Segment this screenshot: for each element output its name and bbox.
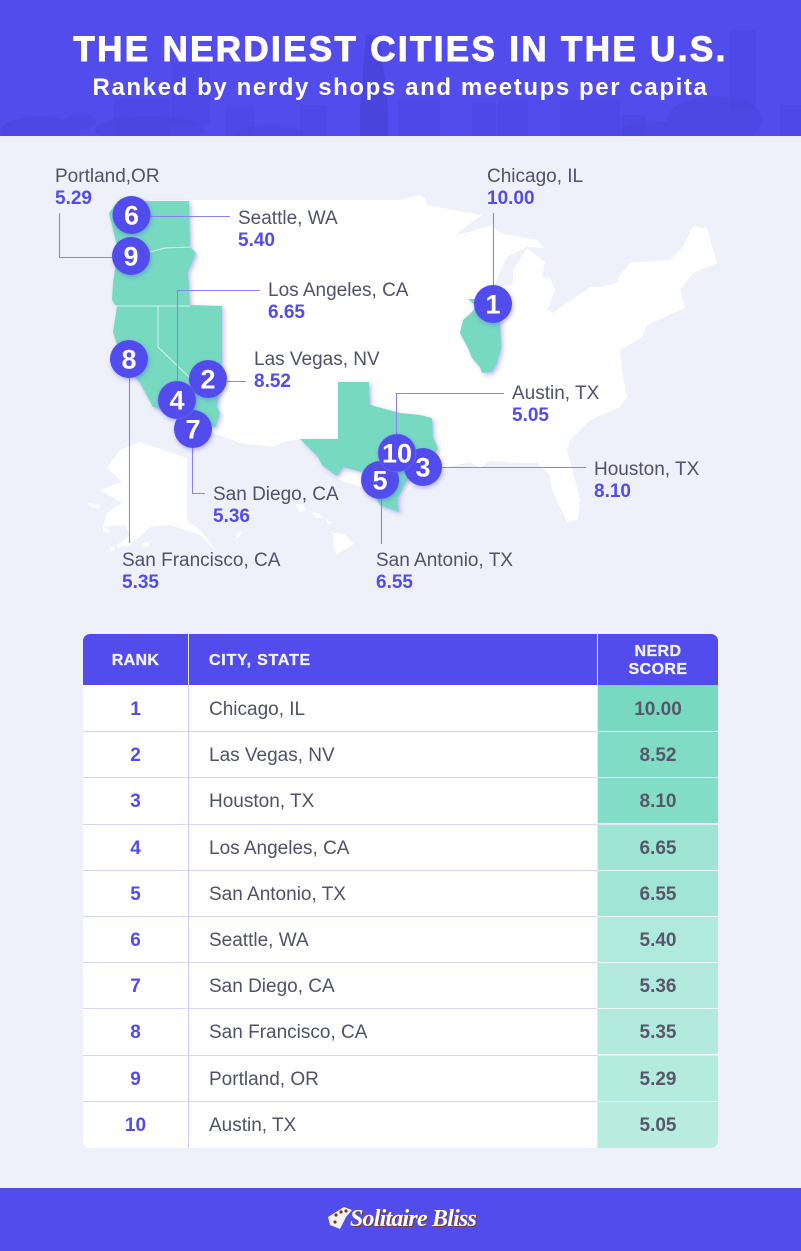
label: San Diego: 5.36 — [213, 506, 250, 527]
label: Portland — [55, 166, 160, 209]
label: San Antonio — [376, 550, 513, 593]
footer bar — [0, 1188, 801, 1251]
label: Seattle: 5.40 — [238, 230, 275, 251]
row 8 — [83, 1009, 718, 1056]
state: Illinois — [460, 299, 501, 373]
row 4: 6.65 — [640, 838, 676, 859]
marker 2 — [189, 360, 227, 398]
rank markers — [110, 196, 512, 499]
row 1: 1 — [130, 699, 141, 720]
label: Chicago — [487, 166, 583, 209]
marker 6 — [112, 196, 150, 234]
row 1: 10.00 — [634, 699, 682, 720]
logo: Solitaire Bliss — [328, 1206, 478, 1232]
label: Las Vegas — [254, 349, 380, 392]
ranking table — [83, 634, 718, 1148]
row 7: 7 — [130, 976, 141, 997]
marker 10 — [378, 434, 416, 472]
label: Houston — [594, 459, 699, 502]
marker 5: 5 — [372, 466, 388, 496]
label: Houston: 8.10 — [594, 481, 631, 502]
row 2: 2 — [130, 745, 141, 766]
marker 7: 7 — [185, 414, 201, 444]
row 9 — [83, 1056, 718, 1102]
state: Texas — [300, 382, 438, 512]
label: Austin: Austin, TX — [512, 383, 599, 404]
row 10: 5.05 — [640, 1115, 676, 1136]
header: rank: RANK — [112, 652, 159, 669]
marker 5 — [361, 461, 399, 499]
row 5: 5 — [130, 884, 141, 905]
row 3: 8.10 — [640, 791, 676, 812]
label: Chicago: Chicago, IL — [487, 166, 583, 187]
row 1 — [83, 685, 718, 732]
row 4 — [83, 825, 718, 871]
marker 3 — [404, 448, 442, 486]
label: Seattle: Seattle, WA — [238, 208, 338, 229]
label: Seattle — [238, 208, 338, 251]
label: Los Angeles — [268, 280, 408, 323]
row 2: Las Vegas, NV — [209, 745, 335, 766]
row 2: 8.52 — [640, 745, 676, 766]
table header — [83, 634, 718, 685]
row 6: Seattle, WA — [209, 930, 309, 951]
connector lines — [60, 213, 586, 544]
row 5: 6.55 — [640, 884, 676, 905]
icon: playing cards — [328, 1207, 352, 1229]
row 7: 5.36 — [640, 976, 676, 997]
map: Alaska — [100, 442, 217, 552]
label: San Diego — [213, 484, 339, 527]
title: THE NERDIEST CITIES IN THE U.S. — [73, 30, 728, 69]
state: Washington, Oregon, California, Nevada, Arizona — [109, 201, 222, 428]
marker 1: 1 — [485, 290, 501, 320]
row 4: 4 — [130, 838, 141, 859]
label: San Francisco: San Francisco, CA — [122, 550, 280, 571]
row 3: 3 — [130, 791, 141, 812]
skyline photo backdrop — [0, 35, 763, 136]
label: San Francisco: 5.35 — [122, 572, 159, 593]
label: Chicago: 10.00 — [487, 188, 535, 209]
marker 3: 3 — [415, 452, 431, 482]
marker 4: 4 — [169, 386, 185, 416]
header: city: CITY, STATE — [209, 652, 311, 669]
marker 8 — [110, 340, 148, 378]
marker 6: 6 — [124, 200, 139, 230]
marker 8: 8 — [121, 344, 137, 374]
row 8: 5.35 — [640, 1022, 676, 1043]
row 4: Los Angeles, CA — [209, 838, 349, 859]
marker 9 — [112, 237, 150, 275]
row 9: 5.29 — [640, 1069, 676, 1090]
row 6: 5.40 — [640, 930, 676, 951]
label: Austin: 5.05 — [512, 405, 549, 426]
label: Las Vegas: 8.52 — [254, 371, 291, 392]
label: San Antonio: 6.55 — [376, 572, 413, 593]
label: Portland: 5.29 — [55, 188, 92, 209]
marker 7 — [174, 410, 212, 448]
header: score — [628, 643, 687, 678]
map: Aleutian islands — [88, 503, 149, 552]
row 10 — [83, 1102, 718, 1148]
row 10: Austin, TX — [209, 1115, 296, 1136]
row 5: San Antonio, TX — [209, 884, 346, 905]
row 5 — [83, 871, 718, 917]
marker 10: 10 — [382, 438, 412, 468]
row 7: San Diego, CA — [209, 976, 335, 997]
row 3 — [83, 778, 718, 825]
label: Portland: Portland,OR — [55, 166, 160, 187]
row 1: Chicago, IL — [209, 699, 305, 720]
label: Las Vegas: Las Vegas, NV — [254, 349, 380, 370]
label: Los Angeles: Los Angeles, CA — [268, 280, 408, 301]
row 3: Houston, TX — [209, 791, 314, 812]
label: Austin — [512, 383, 599, 426]
row 7 — [83, 963, 718, 1009]
label: Houston: Houston, TX — [594, 459, 699, 480]
marker 2: 2 — [200, 364, 216, 394]
label: San Francisco — [122, 550, 280, 593]
header banner — [0, 0, 801, 136]
header: score: NERD — [635, 643, 681, 660]
marker 9: 9 — [123, 242, 139, 272]
row 8: 8 — [130, 1022, 141, 1043]
header: score: SCORE — [629, 661, 687, 678]
marker 1 — [474, 285, 512, 323]
label: San Antonio: San Antonio, TX — [376, 550, 513, 571]
subtitle: Ranked by nerdy shops and meetups per capita — [93, 74, 708, 101]
row 10: 10 — [125, 1115, 146, 1136]
row 6 — [83, 917, 718, 963]
row 2 — [83, 732, 718, 778]
label: Los Angeles: 6.65 — [268, 302, 305, 323]
map: continental US outline — [150, 195, 717, 522]
label: San Diego: San Diego, CA — [213, 484, 339, 505]
logo wordmark: Solitaire Bliss — [350, 1206, 476, 1232]
map: Hawaii — [236, 504, 354, 555]
row 9: 9 — [130, 1069, 141, 1090]
row 9: Portland, OR — [209, 1069, 319, 1090]
map section — [58, 195, 717, 555]
highlighted states — [109, 201, 501, 512]
row 6: 6 — [130, 930, 141, 951]
row 8: San Francisco, CA — [209, 1022, 367, 1043]
marker 4 — [158, 381, 196, 419]
